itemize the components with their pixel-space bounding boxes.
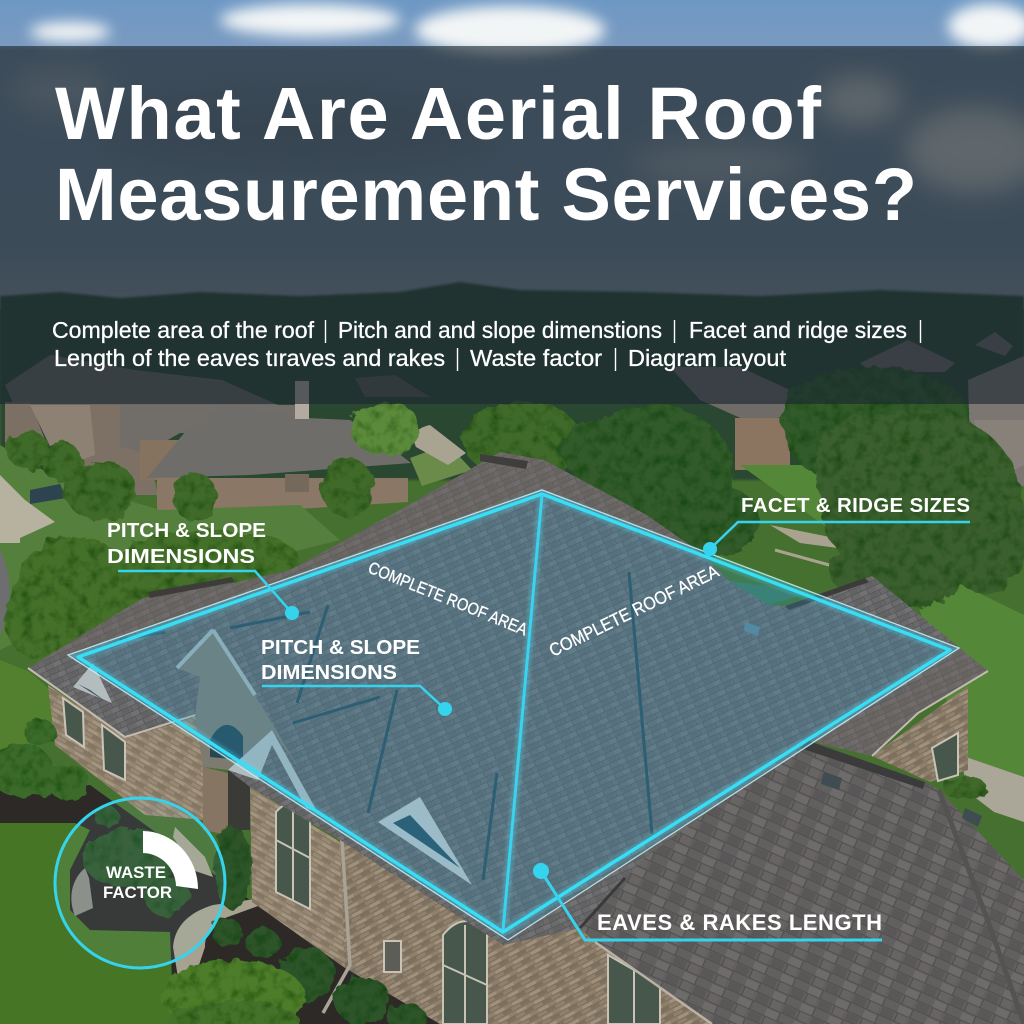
tower gable trim [177,630,255,695]
feature list: Waste factor [470,345,602,371]
shrubs [0,719,987,1024]
callout: waste factor: WASTE [106,863,166,882]
sky [0,0,1024,310]
garden mulch [0,785,440,1024]
distant treeline [0,282,1024,480]
callout: facet and ridge sizes [703,494,970,556]
roof vent [744,622,760,636]
feature list: Pitch and and slope dimenstions [338,317,662,343]
title band [0,46,1024,404]
feature list: Facet and ridge sizes [689,317,907,343]
roof hips [120,572,652,880]
callout: pitch and slope lower: DIMENSIONS [261,662,397,684]
roof area label left: COMPLETE ROOF AREA [366,558,531,640]
callout: pitch and slope upper [107,520,299,620]
stone tower [177,630,300,780]
background houses [5,332,1024,515]
foreground lawn [0,823,180,1024]
front gable [228,730,318,813]
left dormer [73,663,112,703]
feature list: Diagram layout [628,345,787,371]
roof area label right: COMPLETE ROOF AREA [546,561,722,661]
main roof [28,452,988,945]
background trees [5,367,1024,658]
house windows [63,698,958,1024]
tower arch [210,725,243,760]
roof measurement outline [68,490,959,940]
green gap between roofs [729,581,812,605]
title: Measurement Services? [55,153,917,236]
right dormer [378,797,472,885]
title: What Are Aerial Roof [55,72,821,155]
callout: waste factor [55,798,225,968]
feature list [52,317,920,371]
callout: pitch and slope upper: PITCH & SLOPE [107,520,266,542]
foreground tree [161,960,305,1024]
patio and walkway [71,827,258,998]
title [55,72,917,236]
callout: eaves and rakes length: EAVES & RAKES LENGTH [597,910,882,935]
foreground right roof [580,741,1024,1024]
callout: pitch and slope upper: DIMENSIONS [107,546,255,568]
base ground [0,300,1024,1024]
callout: facet and ridge sizes: FACET & RIDGE SIZES [741,494,970,517]
callout: eaves and rakes length [533,863,882,940]
feature list: Complete area of the roof [52,317,315,343]
callout: waste factor: FACTOR [103,883,172,902]
callout: pitch and slope lower: PITCH & SLOPE [261,637,420,659]
house walls [48,685,968,1024]
left neighbouring house [5,381,411,515]
feature list: Length of the eaves tıraves and rakes [54,345,445,371]
downspout [323,840,350,1013]
upper left lawn [0,660,55,760]
midground lawn and paths [0,425,1024,822]
icon: waste factor gauge [143,831,198,889]
callout: pitch and slope lower [261,637,452,716]
